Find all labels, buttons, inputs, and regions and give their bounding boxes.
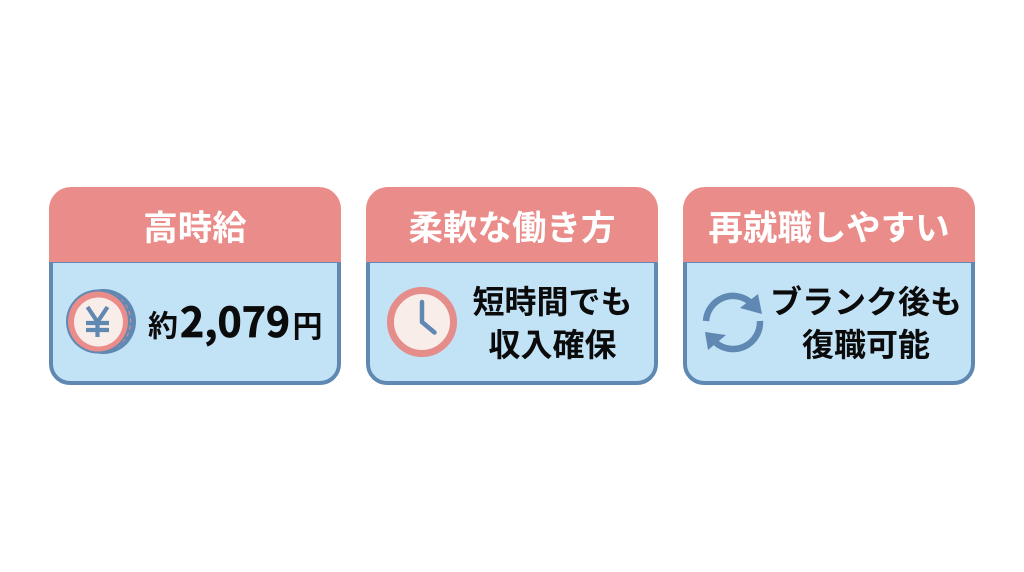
body text: ブランク後も [770, 277, 962, 323]
heading: 柔軟な働き方 [408, 200, 616, 250]
heading: 再就職しやすい [708, 200, 950, 250]
header band [683, 187, 975, 262]
icon: yen coin [66, 289, 136, 354]
icon: refresh arrows [705, 294, 762, 350]
panel body [685, 261, 973, 383]
icon: clock [390, 290, 454, 354]
body text: 約2,079円 [148, 289, 322, 349]
header band [366, 187, 658, 262]
body text: 約2,079円: 約 [148, 302, 178, 346]
body text: 復職可能 [802, 320, 930, 366]
body text: 約2,079円: 円 [292, 302, 322, 346]
panel body [368, 261, 656, 383]
body text [770, 277, 962, 366]
panel: 再就職しやすい [683, 187, 975, 383]
panel: 高時給 [49, 187, 341, 383]
body text: 収入確保 [488, 320, 617, 366]
panel: 柔軟な働き方 [366, 187, 658, 383]
header band [49, 187, 341, 262]
panel body [51, 261, 339, 383]
body text: 短時間でも [472, 277, 633, 323]
heading: 高時給 [143, 200, 247, 250]
body text: 約2,079円: 2,079 [180, 289, 290, 349]
body text [472, 277, 633, 366]
